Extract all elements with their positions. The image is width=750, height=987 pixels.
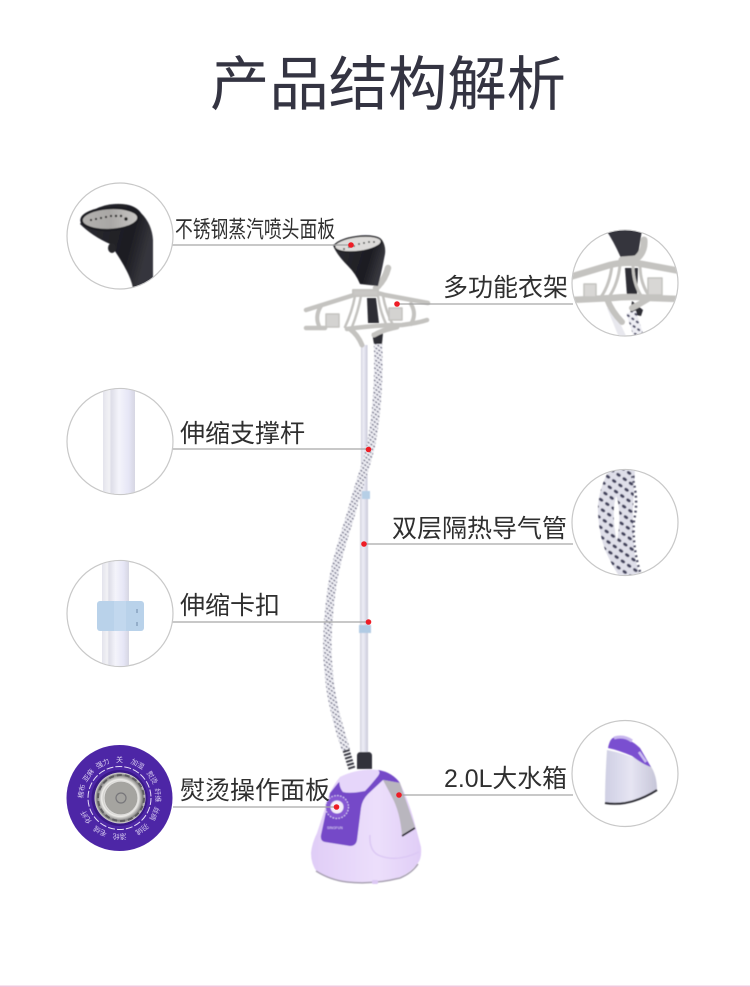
brand: SINGFUN bbox=[327, 826, 343, 830]
steam hose bbox=[327, 342, 378, 750]
dial labels: 亚麻 bbox=[81, 767, 96, 784]
hanger bbox=[306, 268, 428, 345]
label: hose: 双层隔热导气管 bbox=[392, 515, 567, 543]
dial bbox=[326, 796, 348, 818]
label: telescopic pole: 伸缩支撑杆 bbox=[180, 420, 305, 448]
neck cover bbox=[339, 770, 380, 793]
pole clips bbox=[359, 491, 371, 633]
dial labels: 毛绒 bbox=[92, 824, 109, 839]
circle: nozzle detail bbox=[67, 183, 173, 289]
dial labels: 棉布 bbox=[76, 784, 87, 799]
base feet bbox=[372, 880, 378, 884]
dial labels: 化纤 bbox=[79, 809, 94, 826]
label: hanger: 多功能衣架 bbox=[443, 274, 568, 302]
circle: hanger detail bbox=[570, 230, 680, 340]
dial labels: 加湿 bbox=[129, 757, 146, 771]
circle: clip detail bbox=[67, 555, 173, 673]
base control panel bbox=[321, 770, 400, 846]
leader lines bbox=[172, 245, 573, 807]
hose top collar bbox=[372, 333, 383, 344]
water window bbox=[383, 780, 415, 835]
label: control panel: 熨烫操作面板 bbox=[180, 777, 330, 805]
dial labels: 丝绸 bbox=[148, 805, 162, 822]
circle: hose detail bbox=[572, 468, 678, 580]
callout dots bbox=[334, 242, 402, 810]
dial labels: 强力 bbox=[94, 756, 111, 771]
dial labels: 羽绒 bbox=[134, 821, 150, 837]
title: 产品结构解析 bbox=[210, 52, 566, 118]
telescopic pole bbox=[360, 345, 368, 755]
product: garment steamer bbox=[306, 234, 428, 884]
steamer base bbox=[311, 770, 421, 884]
dial labels: 关 bbox=[116, 755, 123, 764]
label: clip: 伸缩卡扣 bbox=[180, 592, 280, 620]
circle: water tank detail bbox=[572, 720, 678, 826]
circle: control dial detail bbox=[66, 745, 172, 851]
hose collar bbox=[346, 750, 352, 769]
dial labels: 熨烫 bbox=[145, 769, 160, 786]
pole base collar bbox=[357, 752, 372, 769]
label: water tank: 2.0L大水箱 bbox=[444, 765, 567, 793]
dial labels bbox=[76, 755, 163, 841]
hanger post bbox=[367, 298, 379, 323]
dial knob bbox=[94, 772, 146, 824]
dial labels: 纤维 bbox=[153, 788, 163, 803]
circle: pole detail bbox=[67, 385, 173, 500]
steamer head bbox=[333, 234, 385, 286]
bottom border bbox=[0, 986, 750, 987]
label: nozzle panel: 不锈钢蒸汽喷头面板 bbox=[175, 216, 335, 242]
dial labels: 涤纶 bbox=[112, 832, 126, 841]
